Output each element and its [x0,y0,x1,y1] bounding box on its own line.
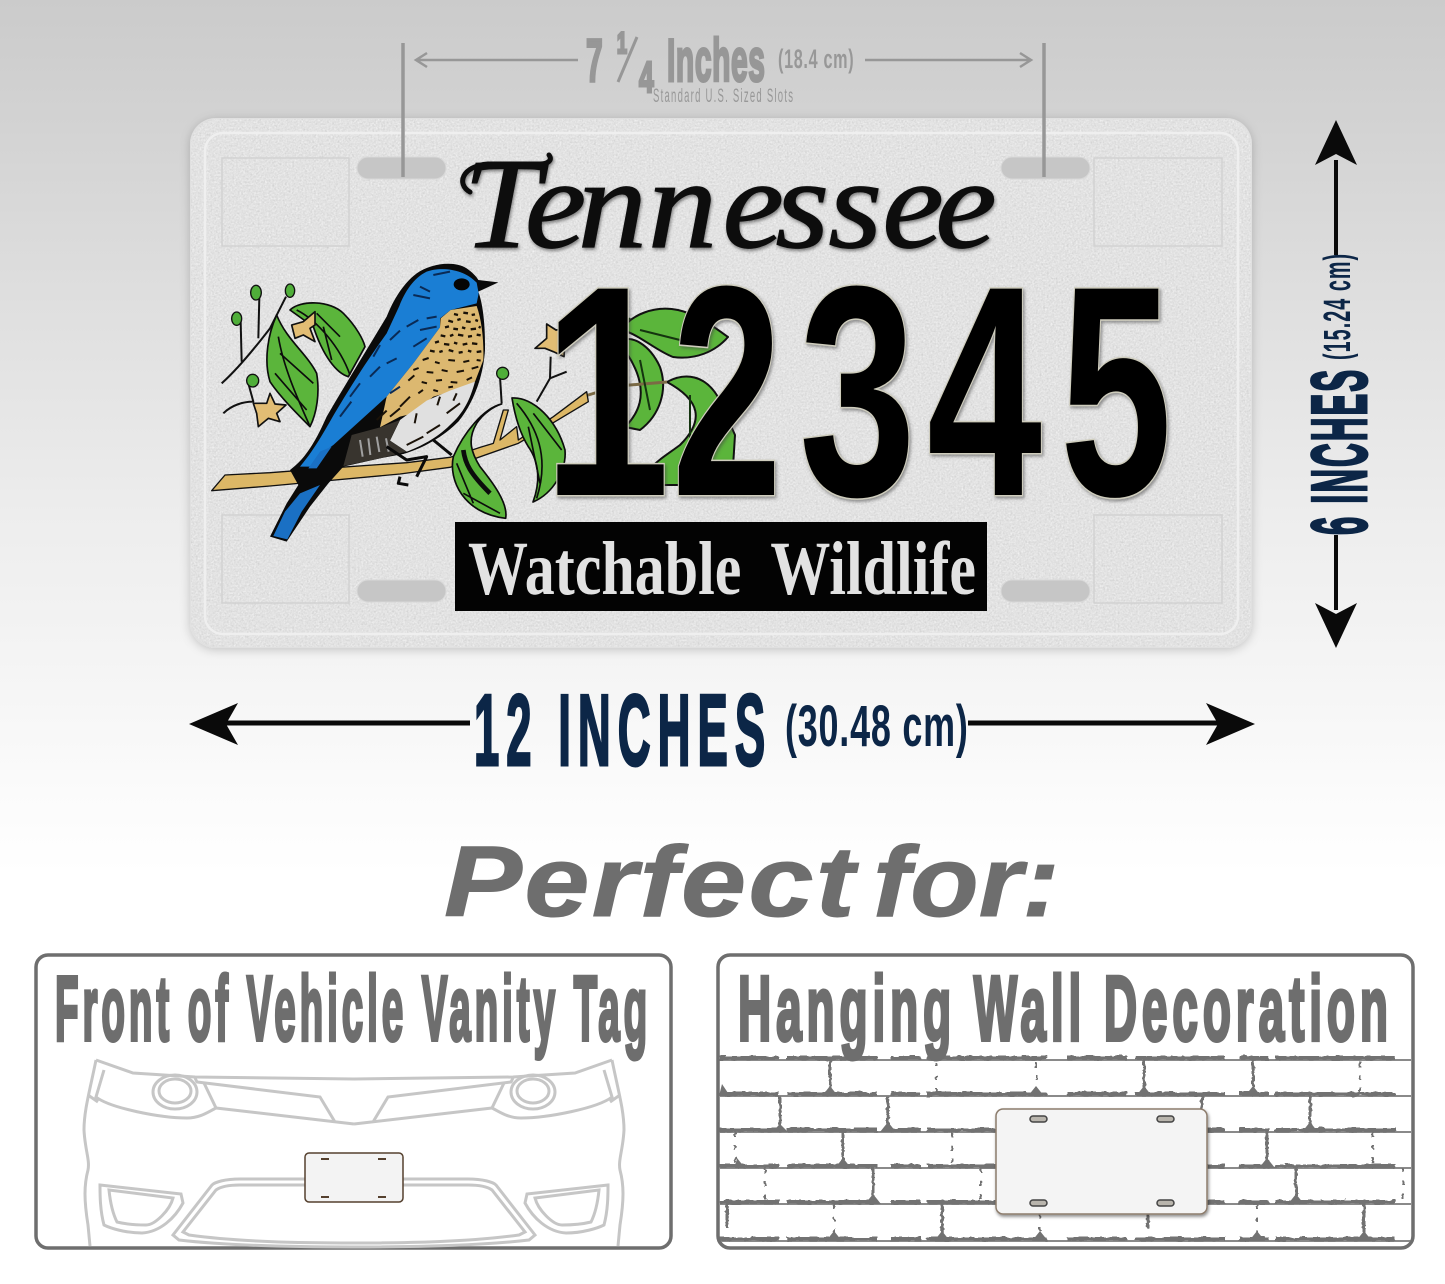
dimension label: 7 [586,28,603,95]
T swash [463,155,550,192]
brick wall pattern [719,1058,1412,1241]
embossed corner squares [222,158,1222,603]
branch [212,392,588,491]
height arrow [1334,160,1338,610]
feather flecks [340,272,481,457]
plate body [190,118,1252,648]
breast [380,306,483,427]
bluebird illustration [212,264,588,542]
plate number: 5 [1060,223,1172,559]
bird feet [387,440,452,485]
panel frame [718,955,1413,1248]
width label [474,673,968,787]
state name: Tennessee [463,133,997,275]
arrowhead right [1206,703,1255,745]
dimension label: Inches [667,28,765,95]
plate number: 3 [799,223,916,559]
mounting slots [357,157,1090,602]
leaves [267,303,565,518]
width arrow [225,720,1220,726]
width label: (30.48 cm) [785,694,968,759]
mortar joints [719,1084,1372,1241]
height label: 6 INCHES [1296,370,1383,535]
plate number [543,223,1172,559]
panel title: Hanging Wall Decoration [738,958,1388,1060]
heading: perfect for [444,826,1060,938]
dimension label: Standard U.S. Sized Slots [653,86,793,107]
dimension guide lines [403,43,1044,177]
dimension label [586,28,854,107]
panel title: Front of Vehicle Vanity Tag [55,957,647,1060]
slot spacing dimension [403,28,1044,177]
mini plate on car [305,1153,403,1202]
width dimension [189,673,1255,787]
head and wing plumage [300,269,479,467]
tail feathers [273,447,332,539]
branch leaves behind numbers [585,309,735,485]
panel frame [36,955,671,1248]
lower body shading [343,420,407,466]
arrowhead left [189,703,238,745]
leaf veins [275,310,562,513]
height dimension [1296,120,1383,648]
plate number: 4 [927,223,1043,559]
heading: perfect for: for: [873,827,1060,938]
buds [232,284,509,387]
license plate [190,118,1252,648]
height label [1296,254,1383,535]
bird silhouette [270,264,498,542]
panel: wall decoration [718,955,1413,1248]
plate number: 1 [543,223,670,559]
dimension label: (18.4 cm) [778,44,854,74]
arrowhead top [1315,120,1357,165]
heading: perfect for: Perfect [444,826,859,938]
arrowhead bottom [1315,603,1357,648]
plate number: 2 [672,223,782,559]
bird eye [454,278,470,290]
dimension label: 1 [617,28,627,60]
height label: (15.24 cm) [1317,254,1359,360]
panel frame redraw [718,955,1413,1248]
car front line drawing [84,1060,624,1247]
dimension arrows [416,53,1031,67]
belly [390,382,475,452]
mini plate on wall [996,1109,1207,1214]
panel: front of vehicle [36,955,671,1248]
plate speckle texture [191,119,1251,647]
plate embossed border [205,133,1238,634]
dimension label: 4 [639,52,654,102]
slogan banner: Watchable Wildlife [468,527,976,611]
flowers [253,312,569,427]
twigs [222,297,567,413]
width label: 12 INCHES [474,673,765,787]
